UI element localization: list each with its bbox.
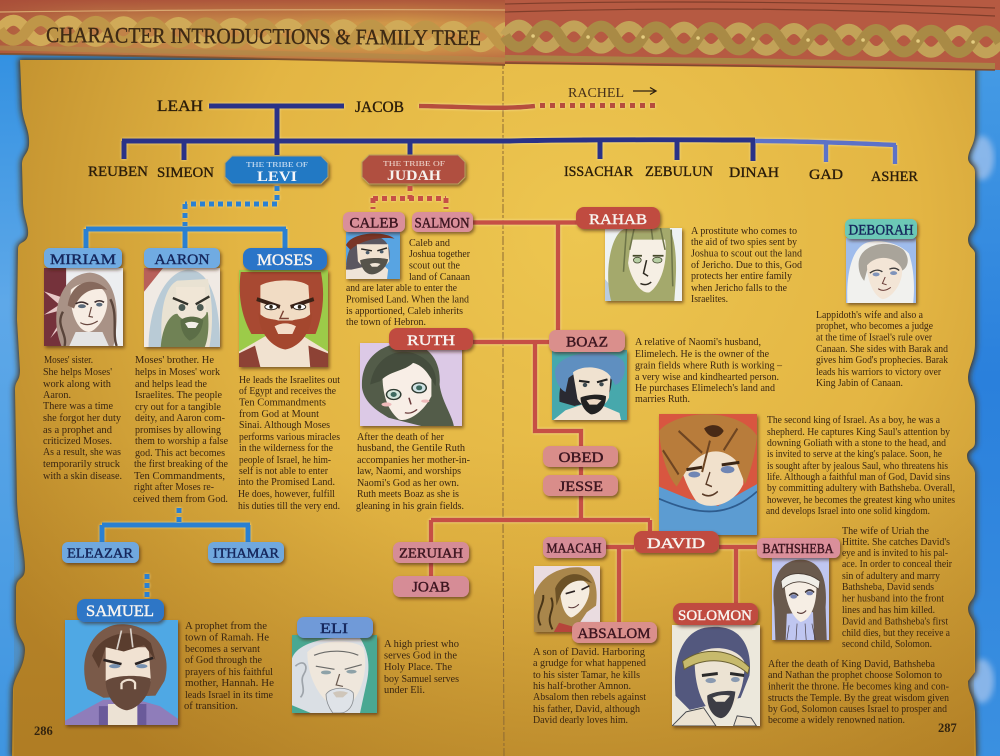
portrait: Rahab <box>605 228 682 301</box>
label: Rahab: RAHAB <box>589 212 647 228</box>
portrait: Moses <box>239 270 328 367</box>
text: Rahab: Israelites. <box>691 294 728 305</box>
text: Deborah: Lappidoth's wife and also a <box>816 310 923 321</box>
name: Dinah: DINAH <box>729 165 779 181</box>
name: Asher: ASHER <box>871 169 918 185</box>
text: Ruth: accompanies her mother-in- <box>357 455 470 466</box>
text: Aaron: them to worship a false <box>135 436 228 447</box>
label: Miriam: MIRIAM <box>50 252 116 268</box>
text: Aaron: deity, and Aaron com- <box>135 413 225 424</box>
text: Aaron: Israelites. The people <box>135 390 222 401</box>
text: Miriam: As a result, she was <box>43 447 121 458</box>
text: Miriam: criticized Moses. <box>43 436 112 447</box>
text: Rahab <box>691 226 803 305</box>
text: Boaz <box>635 337 783 405</box>
header banner: left page <box>0 0 522 65</box>
text: Boaz: a very wise and kindhearted person. <box>635 372 779 383</box>
text: David: however, he becomes the greatest king who unites <box>767 495 955 506</box>
name: Jacob: JACOB <box>355 99 404 116</box>
label: Maacah: MAACAH <box>546 540 602 556</box>
text: Miriam: work along with <box>43 379 112 390</box>
text: Moses: performs various miracles <box>239 432 340 443</box>
text: Deborah <box>816 310 949 389</box>
text: Ruth: husband, the Gentile Ruth <box>357 443 466 454</box>
name: Zebulun: ZEBULUN <box>645 164 713 180</box>
text: Miriam: There was a time <box>43 401 113 412</box>
text: Miriam <box>43 355 122 482</box>
text: Solomon: become a widely renowned nation. <box>768 715 905 726</box>
text: Samuel: becomes a servant <box>185 644 260 655</box>
name: Simeon: SIMEON <box>157 165 214 181</box>
badge: tribe of Judah: JUDAH <box>387 168 441 184</box>
text: Moses: people of Israel, he him- <box>239 455 331 466</box>
label: Rahab <box>576 207 660 229</box>
text: Bathsheba: sin of adultery and marry <box>842 571 941 582</box>
text: Solomon: and Nathan the prophet choose Solomon to <box>768 670 942 681</box>
label: Absalom: ABSALOM <box>578 626 650 642</box>
text: Moses: Sinai. Although Moses <box>239 420 330 431</box>
text: Miriam: She helps Moses' <box>43 367 112 378</box>
text: Absalom: David dearly loves him. <box>533 715 628 726</box>
header banner: right page <box>505 0 1000 70</box>
text: Bathsheba: ace. In order to conceal their <box>842 559 952 570</box>
label: Bathsheba: BATHSHEBA <box>762 541 834 556</box>
text: Rahab: Joshua to scout out the land <box>691 248 803 260</box>
label: Solomon: SOLOMON <box>678 608 752 624</box>
text: Deborah: leads his warriors to victory over <box>816 367 941 378</box>
navy tree lines: Jacob's children <box>122 106 896 164</box>
centre book fold <box>503 60 504 756</box>
label: Eli <box>297 617 373 638</box>
text: Eli: under Eli. <box>384 685 425 696</box>
text: Solomon: inherit the throne. He becomes king and con- <box>768 682 949 692</box>
label: Miriam <box>44 248 122 268</box>
text: David: The second king of Israel. As a boy, he was a <box>767 415 940 426</box>
text: David: shepherd. He captures King Saul's attention by <box>767 427 951 438</box>
text: Ruth: law, Naomi, and worships <box>357 466 461 477</box>
text: Bathsheba: second child, Solomon. <box>842 639 932 650</box>
portrait: David <box>659 414 757 535</box>
label: Salmon: SALMON <box>414 216 470 232</box>
text: Samuel: A prophet from the <box>185 621 267 632</box>
text: David: and develops Israel into one solid kingdom. <box>766 506 930 517</box>
text: Caleb <box>346 238 471 328</box>
text: Caleb: scout out the <box>409 260 460 272</box>
text: Absalom <box>533 647 647 726</box>
name: Reuben: REUBEN <box>88 164 148 180</box>
text: Miriam: she forgot her duty <box>43 413 122 424</box>
label: Joab: JOAB <box>412 580 450 596</box>
text: Moses: his duties till the very end. <box>238 501 340 512</box>
portrait: Deborah <box>846 238 916 303</box>
text: David: downing Goliath with a stone to the head, and <box>767 438 947 449</box>
text: Miriam: Aaron. <box>43 390 71 401</box>
text: Samuel <box>184 621 274 712</box>
label: Joab <box>393 576 469 597</box>
text: Eli: boy Samuel serves <box>384 674 459 685</box>
text: Eli: serves God in the <box>384 650 457 662</box>
text: Aaron <box>133 355 228 505</box>
text: Aaron: the first breaking of the <box>134 459 228 470</box>
label: Eleazar: ELEAZAR <box>67 546 134 562</box>
text: Absalom: A son of David. Harboring <box>533 647 646 658</box>
text: Bathsheba: lines and has him killed. <box>842 605 935 616</box>
text: David: is invited to serve at the king's palace. Soon, he <box>767 449 942 460</box>
text: Boaz: Elimelech. He is the owner of the <box>635 349 769 360</box>
text: Solomon: After the death of King David, Bathsheba <box>768 659 935 670</box>
text: Moses: self is not able to enter <box>239 466 328 477</box>
label: Ithamar: ITHAMAR <box>213 546 280 562</box>
text: David <box>766 415 955 517</box>
text: Aaron: ceived them from God. <box>133 494 228 505</box>
text: Moses: into the Promised Land. <box>238 477 335 488</box>
text: Aaron: right after Moses re- <box>134 482 214 493</box>
red lines: Judah line <box>373 186 757 623</box>
label: Obed <box>543 446 618 467</box>
text: Bathsheba: Hittite. She catches David's <box>842 537 950 548</box>
text: Aaron: promises by allowing <box>135 425 222 436</box>
label: Zeruiah: ZERUIAH <box>399 546 463 562</box>
label: Obed: OBED <box>558 450 604 466</box>
text: Caleb: Promised Land. When the land <box>346 294 470 306</box>
name: Issachar: ISSACHAR <box>564 164 633 180</box>
label: Maacah <box>543 537 606 558</box>
text: Bathsheba: Bathsheba, David sends <box>842 582 934 593</box>
label: Samuel <box>77 599 164 622</box>
text: Rahab: protects her entire family <box>691 271 793 282</box>
label: Boaz: BOAZ <box>566 334 608 350</box>
label: Samuel: SAMUEL <box>86 603 154 620</box>
title: CHARACTER INTRODUCTIONS & FAMILY TREE <box>46 22 481 50</box>
text: Deborah: at the time of Israel's rule over <box>816 332 932 344</box>
text: Rahab: the aid of two spies sent by <box>691 237 798 248</box>
text: Bathsheba: David and Bathsheba's first <box>842 616 948 628</box>
text: Rahab: A prostitute who comes to <box>691 226 797 237</box>
text: Samuel: town of Ramah. He <box>185 632 269 644</box>
portrait: Aaron <box>144 268 220 347</box>
text: Absalom: Absalom then rebels against <box>533 692 646 703</box>
label: David: DAVID <box>647 536 705 552</box>
text: Bathsheba: eye and is invited to his pal- <box>842 548 948 559</box>
text: Moses: of Egypt and receives the <box>239 386 336 397</box>
portrait: Ruth <box>360 343 462 426</box>
name: Gad: GAD <box>809 167 843 183</box>
text: Absalom: his half-brother Amnon. <box>533 681 631 692</box>
text: Moses: Ten Commandments <box>239 398 326 408</box>
text: Absalom: a grudge for what happened <box>533 658 647 669</box>
text: Samuel: of God through the <box>185 655 262 666</box>
text: Boaz: He purchases Elimelech's land and <box>635 383 776 394</box>
label: Caleb: CALEB <box>350 216 398 232</box>
text: Eli: A high priest who <box>384 639 459 650</box>
text: Caleb: the town of Hebron. <box>346 317 426 328</box>
label: Bathsheba <box>757 538 840 558</box>
text: Moses: from God at Mount <box>239 409 319 420</box>
text: Aaron: god. This act becomes <box>135 448 225 459</box>
text: David: by committing adultery with Bathsheba. Overall, <box>767 483 955 494</box>
text: Solomon: by God, Solomon causes Israel to prosper and <box>768 704 948 715</box>
text: Absalom: to his sister Tamar, he kills <box>533 670 640 681</box>
badge: tribe of Levi: LEVI <box>257 169 297 185</box>
portrait: Caleb <box>346 232 400 279</box>
text: Samuel: leads Israel in its time <box>185 690 273 701</box>
text: Bathsheba: The wife of Uriah the <box>842 526 929 537</box>
label: Eli: ELI <box>320 621 348 637</box>
text: Samuel: prayers of his faithful <box>185 667 273 678</box>
label: Ruth: RUTH <box>407 333 455 349</box>
label: Jesse <box>543 475 618 496</box>
name: Rachel with arrow: RACHEL <box>568 85 624 100</box>
label: Boaz <box>549 330 625 352</box>
page number 287: 287 <box>938 721 957 735</box>
text: Caleb: land of Canaan <box>409 272 471 283</box>
page number 286: 286 <box>34 724 53 738</box>
label: Absalom <box>572 622 657 643</box>
text: Caleb: and are later able to enter the <box>346 283 457 294</box>
text: Moses: in the wilderness for the <box>239 443 333 454</box>
text: Ruth: Ruth meets Boaz as she is <box>357 489 459 500</box>
label: Moses: MOSES <box>257 252 313 269</box>
portrait: Samuel <box>65 620 178 725</box>
text: Eli: Holy Place. The <box>384 662 452 673</box>
portrait: Miriam <box>44 268 123 346</box>
text: Miriam: with a skin disease. <box>43 471 122 482</box>
text: Miriam: Moses' sister. <box>44 355 93 366</box>
portrait: Bathsheba <box>772 558 829 640</box>
text: Absalom: his father, David, although <box>533 704 641 715</box>
label: Ruth <box>389 328 473 350</box>
text: Aaron: Moses' brother. He <box>135 355 214 366</box>
text: Miriam: as a prophet and <box>43 425 113 436</box>
text: Rahab: of Jericho. Due to this, God <box>691 260 803 271</box>
text: Bathsheba: child dies, but they receive a <box>842 628 950 639</box>
text: Solomon <box>768 659 950 726</box>
text: Miriam: temporarily struck <box>43 459 121 470</box>
label: Eleazar <box>62 542 139 563</box>
portrait: Eli <box>292 635 377 713</box>
text: Aaron: and helps lead the <box>135 379 207 390</box>
label: Moses <box>243 248 327 270</box>
text: Solomon: structs the Temple. By the great wisdom given <box>768 693 950 704</box>
text: Boaz: marries Ruth. <box>635 394 690 405</box>
text: Moses <box>238 375 340 512</box>
text: David: is sought after by jealous Saul, who threatens his <box>767 461 948 472</box>
text: Aaron: cry out for a tangible <box>135 402 221 413</box>
label: Ithamar <box>208 542 284 563</box>
text: Eli <box>384 639 459 696</box>
portrait: Absalom <box>534 566 600 632</box>
text: Ruth: Naomi's God as her own. <box>357 478 459 489</box>
blue lines: Levi to Moses' family <box>86 186 286 600</box>
label: Zeruiah <box>393 542 469 563</box>
text: Ruth <box>356 432 470 512</box>
text: Caleb: Joshua together <box>409 249 470 260</box>
text: Bathsheba <box>842 526 952 650</box>
text: Samuel: of transition. <box>184 701 238 712</box>
portrait: Boaz <box>552 350 627 420</box>
text: David: life. Although a faithful man of God, David sins <box>767 472 950 483</box>
label: Deborah: DEBORAH <box>848 222 914 238</box>
text: Boaz: grain fields where Ruth is working – <box>635 360 783 372</box>
badge: tribe of Judah <box>362 155 465 184</box>
text: Ruth: After the death of her <box>357 432 444 443</box>
label: Aaron: AARON <box>154 252 210 268</box>
text: Moses: He leads the Israelites out <box>239 375 340 386</box>
text: Rahab: when Jericho falls to the <box>691 283 787 294</box>
text: Boaz: A relative of Naomi's husband, <box>635 337 761 348</box>
Rachel red line <box>419 106 656 108</box>
text: Bathsheba: her husband into the front <box>842 594 944 604</box>
text: Deborah: prophet, who becomes a judge <box>816 321 933 332</box>
name: Rachel with arrow <box>568 85 656 100</box>
text: Deborah: Canaan. She sides with Barak and <box>816 344 949 355</box>
name: Leah: LEAH <box>157 98 203 115</box>
text: Deborah: gives him God's prophecies. Barak <box>816 355 949 366</box>
text: Moses: He does, however, fulfill <box>238 489 335 500</box>
badge: tribe of Levi <box>225 156 328 185</box>
label: David <box>634 531 719 553</box>
text: Aaron: Ten Commandments, <box>134 471 225 482</box>
text: Aaron: helps in Moses' work <box>135 367 221 378</box>
portrait: Solomon <box>672 625 760 726</box>
text: Caleb: is apportioned, Caleb inherits <box>346 306 463 317</box>
text: Deborah: King Jabin of Canaan. <box>816 378 903 389</box>
label: Caleb <box>343 212 405 232</box>
label: Aaron <box>144 248 220 268</box>
label: Solomon <box>673 603 758 625</box>
badge: tribe of Levi: THE TRIBE OF <box>246 160 308 169</box>
badge: tribe of Judah: THE TRIBE OF <box>383 159 445 168</box>
text: Samuel: mother, Hannah. He <box>185 678 274 689</box>
text: Ruth: gleaning in his grain fields. <box>356 501 464 512</box>
label: Jesse: JESSE <box>559 479 603 495</box>
text: Caleb: Caleb and <box>409 238 451 249</box>
